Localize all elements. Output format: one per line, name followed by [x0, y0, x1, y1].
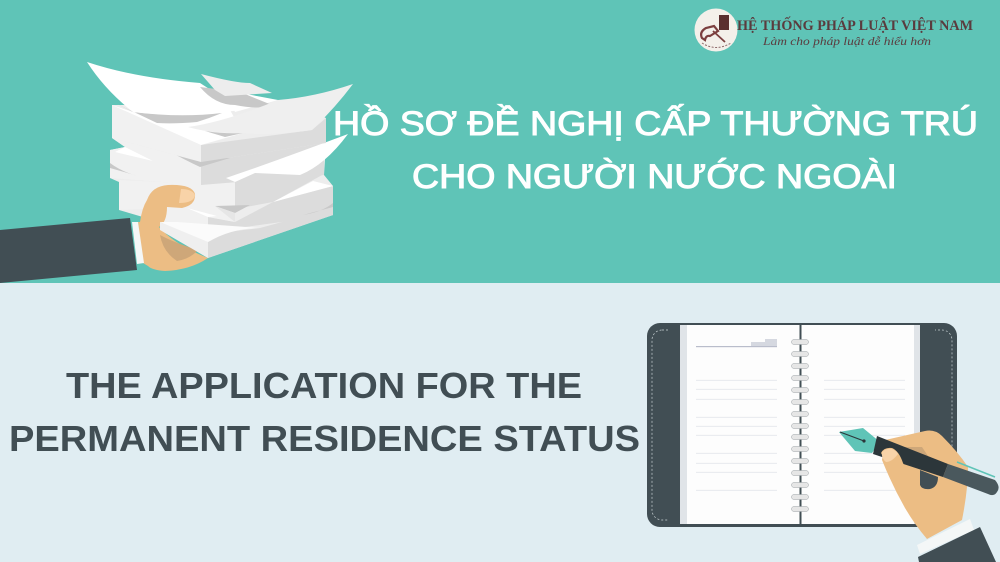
jacket sleeve [0, 218, 137, 283]
paper stack backing [110, 100, 333, 258]
title: Vietnamese heading: CHO NGƯỜI NƯỚC NGOÀI [412, 158, 897, 196]
paper block 4 [160, 207, 208, 230]
panel: teal header band [0, 0, 1000, 283]
ruled lines [696, 380, 905, 490]
spiral rings [792, 340, 808, 512]
logo badge [694, 8, 738, 52]
logo: Hệ thống Pháp luật Việt Nam [694, 8, 973, 52]
shirt cuff [132, 222, 144, 264]
heading: English title: THE APPLICATION FOR THE [66, 365, 582, 406]
panel: light lower band [0, 283, 1000, 562]
paper block 2 [110, 138, 201, 185]
icon: hand holding a stack of papers [0, 62, 353, 283]
logo name: HỆ THỐNG PHÁP LUẬT VIỆT NAM [737, 16, 973, 34]
title: Vietnamese heading [333, 105, 978, 196]
paper block 5 [160, 222, 208, 258]
icon: open spiral notebook [647, 323, 957, 527]
paper block 1 [112, 105, 201, 162]
top sheets [87, 62, 242, 115]
heading: English title [9, 365, 640, 459]
heading: English title: PERMANENT RESIDENCE STATUS [9, 418, 640, 459]
paper block 3 [119, 180, 235, 222]
icon: hand writing with fountain pen [839, 428, 999, 562]
logo tagline: Làm cho pháp luật dễ hiểu hơn [762, 34, 931, 48]
left page header lines [696, 339, 777, 347]
title: Vietnamese heading: HỒ SƠ ĐỀ NGHỊ CẤP THƯỜNG TRÚ [333, 105, 978, 143]
hand and thumb [138, 185, 208, 271]
